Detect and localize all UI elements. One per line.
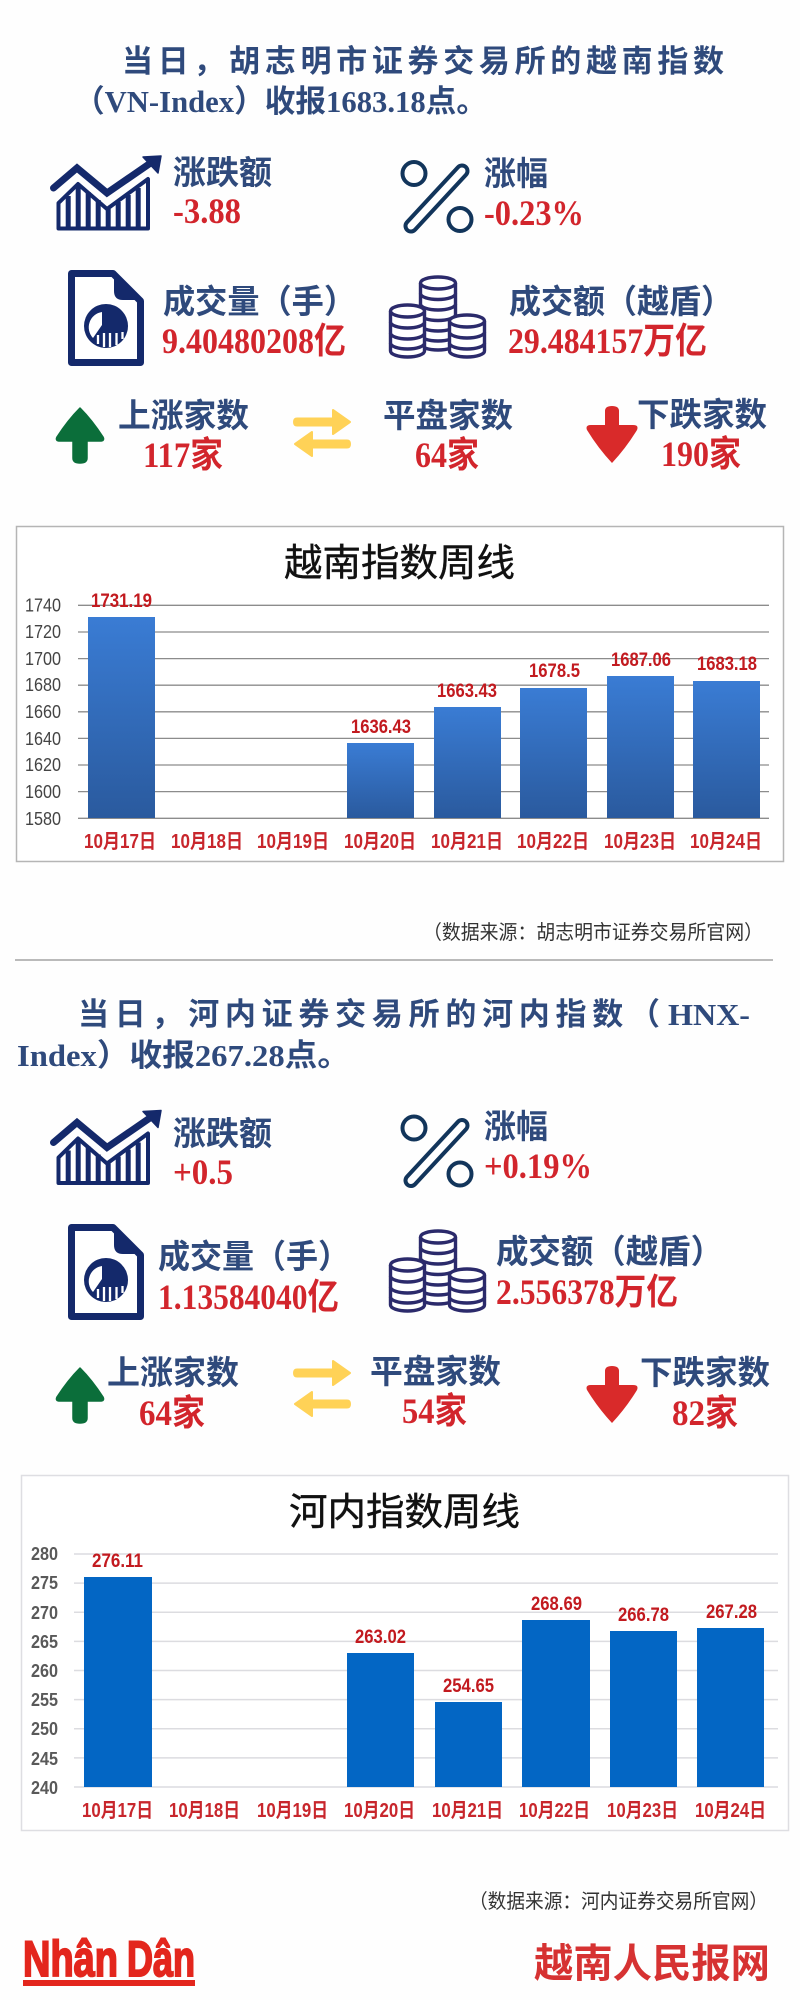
y axis labels: 1660 [25, 702, 61, 722]
stat: advancers [107, 1355, 239, 1433]
y axis labels: 250 [31, 1719, 58, 1739]
icon: coin stacks [390, 1231, 484, 1311]
brand: 越南人民报网: 越南人民报网 [534, 1942, 770, 1986]
date labels: 10月18日 [171, 831, 243, 853]
heading: VN-Index close: 当日，胡志明市证券交易所的越南指数 [122, 44, 724, 79]
date labels: 10月24日 [690, 831, 762, 853]
value labels [91, 591, 757, 738]
stat: percent change [484, 156, 584, 233]
stat: trading value [496, 1234, 723, 1312]
bars [84, 1577, 764, 1787]
y axis labels: 280 [31, 1544, 58, 1564]
date labels [82, 1800, 766, 1822]
stat: price change: -3.88 [173, 191, 241, 231]
stat: trading volume: 1.13584040亿 [158, 1277, 339, 1317]
stat: trading volume: 成交量（手） [158, 1239, 350, 1276]
y axis labels: 1720 [25, 622, 61, 642]
stat: decliners: 82家 [672, 1393, 738, 1433]
stat: trading value: 成交额（越盾） [496, 1234, 723, 1271]
date labels: 10月17日 [84, 831, 156, 853]
heading: VN-Index close [74, 44, 724, 119]
icon: percent [402, 162, 472, 231]
value labels: 1636.43 [351, 717, 411, 738]
date labels: 10月23日 [607, 1800, 678, 1822]
date labels: 10月19日 [257, 831, 329, 853]
date labels [84, 831, 762, 853]
date labels: 10月18日 [169, 1800, 240, 1822]
y axis labels: 1640 [25, 729, 61, 749]
stat: price change [173, 155, 272, 231]
stat: decliners: 190家 [661, 434, 741, 474]
y axis labels: 1600 [25, 782, 61, 802]
date labels: 10月20日 [344, 1800, 415, 1822]
heading: VN-Index close: （VN-Index）收报1683.18点。 [74, 84, 487, 119]
y axis labels: 1740 [25, 596, 61, 616]
stat: advancers [118, 398, 249, 475]
icon: rising line chart [54, 156, 161, 228]
icon: yellow swap arrows [294, 1361, 350, 1416]
y axis labels: 275 [31, 1573, 58, 1593]
value labels: 1683.18 [697, 654, 757, 675]
icon: red down arrow [586, 1366, 638, 1423]
value labels: 254.65 [443, 1676, 494, 1697]
stat: price change: +0.5 [173, 1152, 233, 1192]
date labels: 10月19日 [257, 1800, 328, 1822]
chart title: 河内指数周线 [289, 1492, 520, 1534]
icon: green up arrow [56, 408, 104, 463]
date labels: 10月22日 [519, 1800, 590, 1822]
value labels: 267.28 [706, 1602, 757, 1623]
heading: HNX-Index close [17, 997, 750, 1073]
stat: percent change: 涨幅 [484, 1109, 548, 1146]
stat: decliners [640, 1355, 770, 1433]
y axis labels: 265 [31, 1632, 58, 1652]
stat: decliners: 下跌家数 [637, 397, 767, 434]
logo: Nhan Dan: Dân [127, 1931, 195, 1987]
date labels: 10月21日 [432, 1800, 503, 1822]
stat: trading volume: 9.40480208亿 [162, 321, 346, 361]
stat: percent change: 涨幅 [484, 156, 548, 193]
gridlines [78, 605, 769, 818]
bars [88, 617, 760, 818]
icon: document with pie chart [72, 272, 143, 362]
y axis labels: 1580 [25, 809, 61, 829]
stat: trading value: 2.556378万亿 [496, 1272, 678, 1312]
stat: advancers: 117家 [143, 435, 223, 475]
date labels: 10月22日 [517, 831, 589, 853]
heading: HNX-Index close: 当日，河内证券交易所的河内指数（ [78, 997, 660, 1032]
icon: red down arrow [586, 406, 638, 463]
y axis labels: 255 [31, 1690, 58, 1710]
chart title: 越南指数周线 [284, 543, 515, 585]
date labels: 10月23日 [604, 831, 676, 853]
stat: percent change [484, 1109, 592, 1186]
stat: decliners: 下跌家数 [640, 1355, 770, 1392]
y axis labels: 240 [31, 1778, 58, 1798]
stat: unchanged: 64家 [415, 435, 479, 475]
value labels: 1731.19 [91, 591, 152, 612]
stat: advancers: 64家 [139, 1393, 205, 1433]
value labels: 266.78 [618, 1605, 669, 1626]
stat: trading value [508, 284, 733, 361]
stat: trading volume: 成交量（手） [163, 284, 356, 321]
heading: HNX-Index close: Index）收报267.28点。 [17, 1038, 350, 1073]
section: HNX-Index summary [17, 997, 770, 1433]
y axis labels [25, 596, 61, 829]
date labels: 10月24日 [695, 1800, 766, 1822]
stat: price change [173, 1116, 272, 1192]
stat: trading value: 29.484157万亿 [508, 321, 707, 361]
icon: document with pie chart [72, 1226, 143, 1316]
stat: price change: 涨跌额 [173, 1116, 272, 1153]
stat: advancers: 上涨家数 [118, 398, 249, 435]
date labels: 10月21日 [431, 831, 503, 853]
panel: VN-Index weekly bar chart [16, 526, 784, 862]
y axis labels: 1680 [25, 675, 61, 695]
logo: Nhan Dan: Nhân [23, 1931, 118, 1987]
value labels: 1663.43 [437, 681, 497, 702]
heading: HNX-Index close: HNX- [668, 997, 750, 1032]
stat: percent change: -0.23% [484, 193, 584, 233]
stat: advancers: 上涨家数 [107, 1355, 239, 1392]
value labels: 268.69 [531, 1594, 582, 1615]
stat: unchanged [383, 398, 513, 475]
panel: HNX-Index weekly bar chart [22, 1476, 788, 1830]
value labels: 1678.5 [529, 661, 580, 682]
y axis labels: 245 [31, 1749, 58, 1769]
y axis labels: 1700 [25, 649, 61, 669]
stat: percent change: +0.19% [484, 1146, 592, 1186]
gridlines [74, 1554, 778, 1787]
y axis labels [31, 1544, 58, 1798]
icon: yellow swap arrows [294, 410, 350, 456]
value labels: 1687.06 [611, 650, 671, 671]
stat: unchanged: 平盘家数 [370, 1354, 501, 1391]
y axis labels: 270 [31, 1603, 58, 1623]
icon: percent [402, 1116, 472, 1186]
value labels: 263.02 [355, 1627, 406, 1648]
stat: unchanged: 54家 [402, 1391, 467, 1431]
stat: trading volume [162, 284, 356, 361]
source note: HOSE: （数据来源：胡志明市证券交易所官网） [423, 921, 763, 944]
icon: rising line chart [54, 1110, 161, 1183]
y axis labels: 260 [31, 1661, 58, 1681]
stat: unchanged [370, 1354, 501, 1431]
date labels: 10月17日 [82, 1800, 153, 1822]
y axis labels: 1620 [25, 755, 61, 775]
value labels [92, 1551, 757, 1697]
value labels: 276.11 [92, 1551, 143, 1572]
stat: decliners [637, 397, 767, 474]
stat: price change: 涨跌额 [173, 155, 272, 192]
date labels: 10月20日 [344, 831, 416, 853]
stat: unchanged: 平盘家数 [383, 398, 513, 435]
section: VN-Index summary [54, 44, 767, 475]
stat: trading volume [158, 1239, 350, 1317]
source note: HNX: （数据来源：河内证券交易所官网） [469, 1890, 768, 1913]
icon: coin stacks [390, 277, 484, 357]
icon: green up arrow [56, 1368, 104, 1423]
stat: trading value: 成交额（越盾） [509, 284, 733, 321]
